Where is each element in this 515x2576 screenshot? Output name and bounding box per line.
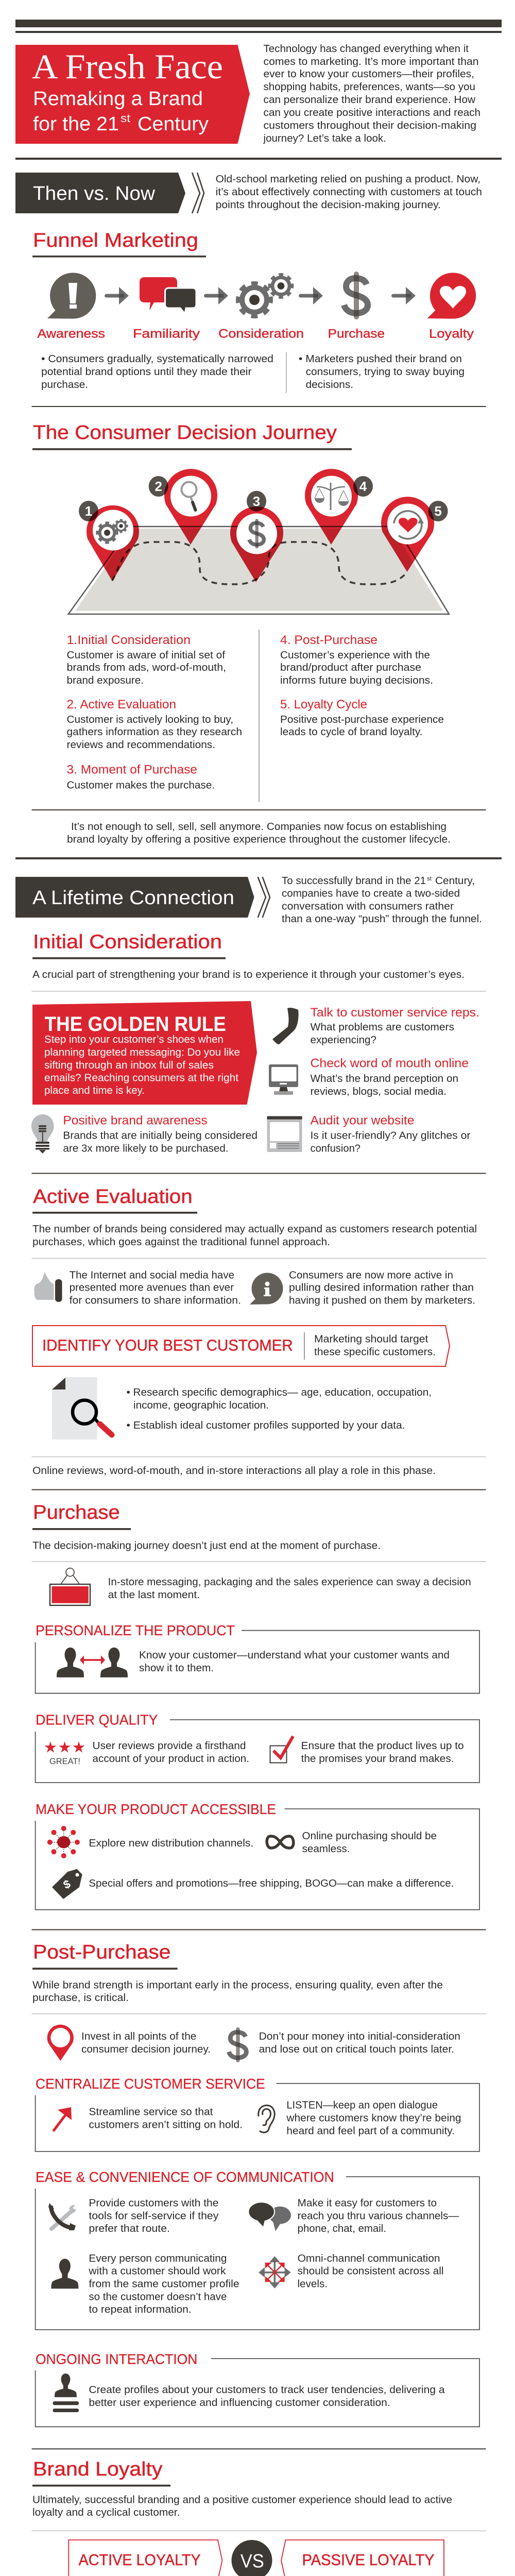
panel: personalize the product: PERSONALIZE THE PRODUCT — [36, 1622, 235, 1638]
then vs now text: it’s about effectively connecting with customers at touch — [216, 187, 482, 198]
omni-channel text: should be consistent across all — [298, 2266, 444, 2277]
identify bullets: income, geographic location. — [133, 1400, 269, 1411]
icon: three stars great — [45, 1741, 84, 1766]
journey conclusion text: brand loyalty by offering a positive experience throughout the customer lifecycle. — [67, 834, 451, 845]
intro text: shopping habits, preferences, wants—so you — [264, 81, 475, 93]
pin 4: post-purchase — [305, 469, 373, 545]
invest text: Invest in all points of the — [81, 2031, 196, 2042]
in-store messaging text — [108, 1577, 471, 1601]
title banner: for the 21 — [33, 113, 119, 135]
journey conclusion text: It’s not enough to sell, sell, sell anymore. Companies now focus on establishing — [71, 821, 447, 833]
funnel stage labels: Familiarity — [133, 327, 200, 341]
icon: loyalty heart bubble — [427, 273, 476, 319]
funnel bullet left: potential brand options until they made their — [41, 366, 252, 378]
omni-channel text: levels. — [298, 2278, 328, 2290]
listen text: heard and feel part of a community. — [286, 2125, 455, 2137]
active loyalty label — [68, 2540, 222, 2576]
don't pour money text — [259, 2031, 460, 2055]
icon: info bubble — [250, 1273, 283, 1304]
purchase intro: The decision-making journey doesn’t just end at the moment of purchase. — [32, 1540, 381, 1552]
provide customers text — [89, 2197, 218, 2234]
ensure product text: Ensure that the product lives up to — [301, 1740, 464, 1752]
ensure product text — [301, 1740, 464, 1765]
funnel bullet right: decisions. — [306, 379, 353, 391]
icon: two speech bubbles — [248, 2202, 291, 2231]
pin 5: loyalty cycle: 5 — [434, 503, 442, 519]
pin 2: active evaluation: 2 — [154, 479, 162, 494]
heading: funnel marketing — [32, 230, 206, 258]
lifetime connection text — [282, 875, 482, 925]
panel: the golden rule: emails? Reaching consumers at the right — [44, 1073, 238, 1084]
versus badge: VS — [241, 2550, 264, 2571]
ensure product text: the promises your brand makes. — [301, 1753, 454, 1765]
consumers more active text: pulling desired information rather than — [289, 1282, 474, 1294]
pin 1: initial consideration — [79, 501, 139, 581]
identify bullets: • Establish ideal customer profiles supported by your data. — [127, 1420, 405, 1431]
title banner: A Fresh Face — [32, 47, 223, 86]
journey step 1 text: brand exposure. — [67, 675, 144, 686]
journey step 4 text: informs future buying decisions. — [280, 675, 433, 686]
funnel bullet right: consumers, trying to sway buying — [306, 366, 465, 378]
journey conclusion text — [67, 821, 451, 845]
heading: post-purchase — [32, 1942, 178, 1970]
icon: person — [51, 2259, 78, 2289]
talk to customer service reps: What problems are customers — [310, 1022, 454, 1033]
icon: distribution hub — [47, 1826, 80, 1858]
lifetime connection text: st — [427, 876, 432, 882]
active evaluation intro: purchases, which goes against the traditional funnel approach. — [32, 1236, 330, 1248]
intro text: can personalize their brand experience. How — [264, 94, 476, 106]
create profiles text — [89, 2384, 445, 2409]
journey step 2 text: reviews and recommendations. — [67, 739, 215, 751]
panel: centralize customer service — [36, 2076, 479, 2151]
journey step 3 text: 3. Moment of Purchase — [67, 763, 197, 777]
heading: post-purchase: Post-Purchase — [33, 1942, 170, 1963]
heading: purchase: Purchase — [33, 1502, 120, 1523]
pin 3: moment of purchase: 3 — [253, 494, 260, 509]
audit your website: Is it user-friendly? Any glitches or — [310, 1130, 471, 1142]
icon: omni-directional arrows — [259, 2256, 291, 2289]
every person text: from the same customer profile — [89, 2278, 239, 2290]
special offers text: Special offers and promotions—free shipping, BOGO—can make a difference. — [89, 1878, 454, 1889]
journey step 1 text: Customer is aware of initial set of — [67, 650, 225, 661]
journey step 2 text — [67, 698, 242, 751]
intro text: journey? Let’s take a look. — [263, 133, 386, 144]
journey step 2 text: gathers information as they research — [67, 726, 242, 738]
journey step 4 text — [280, 633, 433, 686]
online purchasing text: Online purchasing should be — [302, 1831, 437, 1842]
funnel bullet left — [41, 353, 273, 391]
funnel stage labels — [37, 327, 474, 341]
create profiles text: better user experience and influencing customer consideration. — [89, 2397, 390, 2409]
dashed route — [112, 542, 407, 584]
don't pour money text: Don’t pour money into initial-consideration — [259, 2031, 460, 2042]
panel: ease and convenience of communication — [36, 2169, 479, 2330]
make it easy text: Make it easy for customers to — [298, 2197, 437, 2209]
brand loyalty intro: Ultimately, successful branding and a positive customer experience should lead to active — [32, 2494, 452, 2505]
icon: price tag — [52, 1869, 82, 1899]
post-purchase intro — [32, 1979, 443, 2004]
icon: phone — [272, 1008, 299, 1044]
consumers more active text — [289, 1270, 475, 1307]
talk to customer service reps: Talk to customer service reps. — [310, 1006, 479, 1020]
icon: phone and wrench — [48, 2203, 76, 2230]
map base — [68, 527, 449, 614]
lifetime connection text: Century, — [435, 875, 475, 887]
consumers more active text: having it pushed on them by marketers. — [289, 1295, 475, 1307]
panel: deliver quality — [36, 1712, 479, 1783]
every person text: so the customer doesn’t have — [89, 2291, 227, 2302]
identify bullets: • Research specific demographics— age, education, occupation, — [127, 1387, 432, 1398]
then vs now text: Old-school marketing relied on pushing a product. Now, — [216, 174, 480, 185]
journey step 2 text: Customer is actively looking to buy, — [67, 714, 233, 725]
callout: identify your best customer: IDENTIFY YOUR BEST CUSTOMER — [42, 1336, 293, 1354]
journey step 5 text: leads to cycle of brand loyalty. — [280, 726, 422, 738]
active evaluation intro — [32, 1224, 477, 1248]
funnel diagram — [37, 272, 476, 341]
lifetime connection text: than a one-way “push” through the funnel. — [282, 913, 482, 925]
omni-channel text — [298, 2253, 444, 2290]
active loyalty label: ACTIVE LOYALTY — [79, 2551, 201, 2569]
funnel stage labels: Loyalty — [429, 327, 474, 341]
panel: the golden rule: THE GOLDEN RULE — [44, 1013, 226, 1036]
icon: location pin — [47, 2025, 74, 2061]
arrow 1 — [105, 287, 129, 304]
in-store messaging text: at the last moment. — [108, 1589, 200, 1601]
icon: monitor — [269, 1064, 298, 1095]
heading: funnel marketing: Funnel Marketing — [33, 230, 198, 251]
talk to customer service reps: experiencing? — [310, 1035, 376, 1046]
active evaluation intro: The number of brands being considered may actually expand as customers research potential — [32, 1224, 477, 1235]
listen text: LISTEN—keep an open dialogue — [286, 2100, 438, 2111]
talk to customer service reps — [310, 1006, 479, 1046]
positive brand awareness: Brands that are initially being considered — [63, 1130, 258, 1142]
streamline text — [89, 2107, 243, 2131]
passive loyalty label: PASSIVE LOYALTY — [302, 2551, 435, 2569]
funnel bullet left: • Consumers gradually, systematically narrowed — [41, 353, 273, 365]
heading: active evaluation: Active Evaluation — [33, 1186, 193, 1208]
icon: dollar — [229, 2027, 246, 2062]
post-purchase intro: purchase, is critical. — [32, 1992, 129, 2004]
lifetime connection text: conversation with consumers rather — [282, 901, 454, 912]
personalize text: show it to them. — [139, 1663, 214, 1674]
make it easy text: reach you thru various channels— — [298, 2210, 459, 2222]
pin 4: post-purchase: 4 — [359, 479, 367, 494]
panel: personalize the product — [36, 1622, 479, 1693]
identify bullets — [127, 1387, 432, 1431]
intro text: comes to marketing. It’s more important than — [264, 56, 479, 67]
icon: stamp person with stacked bars — [53, 2374, 79, 2412]
heading: purchase — [32, 1502, 131, 1530]
every person text: with a customer should work — [88, 2266, 227, 2277]
user reviews text: User reviews provide a firsthand — [93, 1740, 246, 1752]
journey step 5 text: 5. Loyalty Cycle — [280, 698, 367, 711]
check word of mouth online: reviews, blogs, social media. — [310, 1086, 447, 1097]
create profiles text: Create profiles about your customers to track user tendencies, delivering a — [89, 2384, 445, 2396]
title banner — [15, 45, 250, 144]
audit your website: Audit your website — [310, 1114, 414, 1128]
invest text — [81, 2031, 211, 2055]
arrow 3 — [299, 287, 323, 304]
streamline text: Streamline service so that — [89, 2107, 213, 2118]
brand loyalty intro: loyalty and a cyclical customer. — [32, 2507, 180, 2518]
icon: three stars great: GREAT! — [49, 1756, 80, 1766]
panel: make your product accessible — [36, 1801, 479, 1910]
journey step 1 text: 1.Initial Consideration — [67, 633, 191, 647]
panel: the golden rule: planning targeted messaging: Do you like — [44, 1047, 240, 1058]
callout: identify your best customer: Marketing should target — [314, 1334, 428, 1345]
banner: then vs now — [15, 173, 204, 213]
internet and social media text: The Internet and social media have — [70, 1270, 234, 1281]
then vs now text: points throughout the decision-making journey. — [216, 199, 441, 211]
banner: a lifetime connection: A Lifetime Connection — [32, 887, 234, 909]
callout: identify your best customer: these specific customers. — [314, 1347, 436, 1358]
heading: brand loyalty: Brand Loyalty — [33, 2459, 162, 2480]
journey map illustration — [68, 469, 449, 614]
icon: hanging store sign — [50, 1568, 90, 1605]
passive loyalty label — [281, 2540, 444, 2576]
lifetime connection text: To successfully brand in the 21 — [282, 875, 426, 887]
journey step 2 text: 2. Active Evaluation — [67, 698, 176, 711]
personalize text: Know your customer—understand what your customer wants and — [139, 1650, 450, 1661]
top header bars — [15, 20, 502, 33]
callout: identify your best customer — [32, 1326, 450, 1366]
panel: ease and convenience of communication: EASE & CONVENIENCE OF COMMUNICATION — [36, 2169, 334, 2185]
invest text: consumer decision journey. — [81, 2044, 211, 2055]
panel: make your product accessible: MAKE YOUR PRODUCT ACCESSIBLE — [36, 1801, 276, 1817]
banner: a lifetime connection — [15, 877, 270, 918]
panel: ongoing interaction — [36, 2351, 479, 2427]
funnel stage labels: Consideration — [218, 327, 304, 341]
funnel bullet left: purchase. — [41, 379, 88, 391]
don't pour money text: and lose out on critical touch points later. — [259, 2044, 454, 2055]
heading: brand loyalty — [32, 2459, 170, 2486]
funnel bullet right: • Marketers pushed their brand on — [299, 353, 462, 365]
panel: ongoing interaction: ONGOING INTERACTION — [36, 2351, 197, 2367]
title banner: Century — [138, 113, 209, 135]
heading: initial consideration — [32, 931, 226, 959]
funnel bullet right — [299, 353, 465, 391]
initial consideration intro: A crucial part of strengthening your brand is to experience it through your customer’s eyes. — [32, 969, 465, 980]
listen text: where customers know they’re being — [286, 2112, 461, 2124]
make it easy text: phone, chat, email. — [298, 2223, 386, 2234]
journey step 4 text: brand/product after purchase — [280, 662, 421, 673]
pin 1: initial consideration: 1 — [85, 503, 92, 519]
user reviews text — [93, 1740, 249, 1765]
arrow 4 — [391, 287, 416, 304]
post-purchase intro: While brand strength is important early in the process, ensuring quality, even after the — [32, 1979, 443, 1991]
brand loyalty intro — [32, 2494, 452, 2518]
banner: then vs now: Then vs. Now — [33, 183, 156, 205]
panel: the golden rule: sifting through an inbox full of sales — [44, 1060, 214, 1071]
explore channels text: Explore new distribution channels. — [89, 1838, 253, 1849]
intro text: customers throughout their decision-making — [264, 120, 476, 131]
online purchasing text: seamless. — [302, 1843, 350, 1855]
panel: the golden rule: place and time is key. — [44, 1085, 145, 1096]
icon: ear — [259, 2105, 274, 2132]
icon: light bulb — [31, 1114, 54, 1154]
journey step 1 text — [67, 633, 226, 686]
make it easy text — [298, 2197, 459, 2234]
journey step 3 text — [67, 763, 215, 791]
audit your website: confusion? — [310, 1143, 360, 1155]
icon: thumbs up — [34, 1272, 62, 1302]
listen text — [286, 2100, 461, 2137]
intro text — [263, 43, 480, 144]
icon: website — [267, 1116, 302, 1152]
arrow 2 — [204, 287, 228, 304]
provide customers text: Provide customers with the — [89, 2197, 218, 2209]
title banner: st — [121, 112, 130, 125]
check word of mouth online: What’s the brand perception on — [310, 1073, 458, 1084]
journey step 5 text: Positive post-purchase experience — [280, 714, 444, 725]
versus badge — [232, 2540, 272, 2576]
panel: the golden rule — [32, 1001, 257, 1105]
journey step 4 text: 4. Post-Purchase — [280, 633, 377, 647]
funnel stage labels: Purchase — [328, 327, 385, 341]
heading: initial consideration: Initial Consideration — [33, 931, 222, 953]
icon: consideration gears — [235, 273, 294, 319]
icon: awareness bubble — [47, 273, 96, 319]
user reviews text: account of your product in action. — [93, 1753, 249, 1765]
positive brand awareness: are 3x more likely to be purchased. — [63, 1143, 229, 1155]
heading: the consumer decision journey — [32, 422, 352, 450]
omni-channel text: Omni-channel communication — [298, 2253, 440, 2264]
online purchasing text — [302, 1831, 437, 1855]
icon: purchase dollar — [344, 272, 368, 319]
every person text: to repeat information. — [89, 2304, 192, 2315]
intro text: can you create positive interactions and reach — [264, 107, 480, 118]
intro text: Technology has changed everything when it — [264, 43, 469, 55]
icon: upward arrow — [54, 2107, 72, 2130]
panel: centralize customer service: CENTRALIZE CUSTOMER SERVICE — [36, 2076, 265, 2092]
journey step 4 text: Customer’s experience with the — [280, 650, 430, 661]
check word of mouth online — [310, 1057, 469, 1097]
heading: the consumer decision journey: The Consumer Decision Journey — [33, 422, 337, 444]
in-store messaging text: In-store messaging, packaging and the sales experience can sway a decision — [108, 1577, 471, 1588]
icon: document with magnifier — [52, 1377, 112, 1439]
panel: the golden rule: Step into your customer’s shoes when — [44, 1034, 224, 1045]
streamline text: customers aren’t sitting on hold. — [89, 2120, 243, 2131]
funnel stage labels: Awareness — [37, 327, 105, 341]
audit your website — [310, 1114, 471, 1155]
then vs now text — [216, 174, 482, 211]
internet and social media text: for consumers to share information. — [70, 1295, 241, 1307]
lifetime connection text: companies have to create a two-sided — [282, 888, 460, 900]
consumers more active text: Consumers are now more active in — [289, 1270, 453, 1281]
every person text — [88, 2253, 239, 2315]
icon: price tag: $ — [61, 1877, 73, 1891]
pin 5: loyalty cycle — [381, 497, 448, 572]
check word of mouth online: Check word of mouth online — [310, 1057, 469, 1071]
provide customers text: tools for self-service if they — [89, 2210, 218, 2222]
icon: familiarity chat bubbles — [140, 277, 196, 314]
pin 2: active evaluation — [149, 469, 217, 545]
icon: checkbox — [270, 1736, 293, 1763]
internet and social media text — [70, 1270, 241, 1307]
icon: two people with arrow — [57, 1648, 128, 1677]
online reviews note: Online reviews, word-of-mouth, and in-store interactions all play a role in this phase. — [32, 1465, 436, 1477]
journey step 1 text: brands from ads, word-of-mouth, — [67, 662, 226, 673]
positive brand awareness — [63, 1114, 258, 1155]
provide customers text: prefer that route. — [89, 2223, 170, 2234]
intro text: ever to know your customers—their profiles, — [264, 69, 474, 80]
icon: infinity — [267, 1836, 294, 1848]
journey step 3 text: Customer makes the purchase. — [67, 780, 215, 791]
positive brand awareness: Positive brand awareness — [63, 1114, 208, 1128]
panel: deliver quality: DELIVER QUALITY — [36, 1712, 158, 1728]
pin 3: moment of purchase — [230, 491, 283, 582]
personalize text — [139, 1650, 450, 1674]
journey step 5 text — [280, 698, 444, 738]
title banner: Remaking a Brand — [33, 88, 203, 110]
every person text: Every person communicating — [89, 2253, 227, 2264]
internet and social media text: presented more avenues than ever — [70, 1282, 234, 1294]
